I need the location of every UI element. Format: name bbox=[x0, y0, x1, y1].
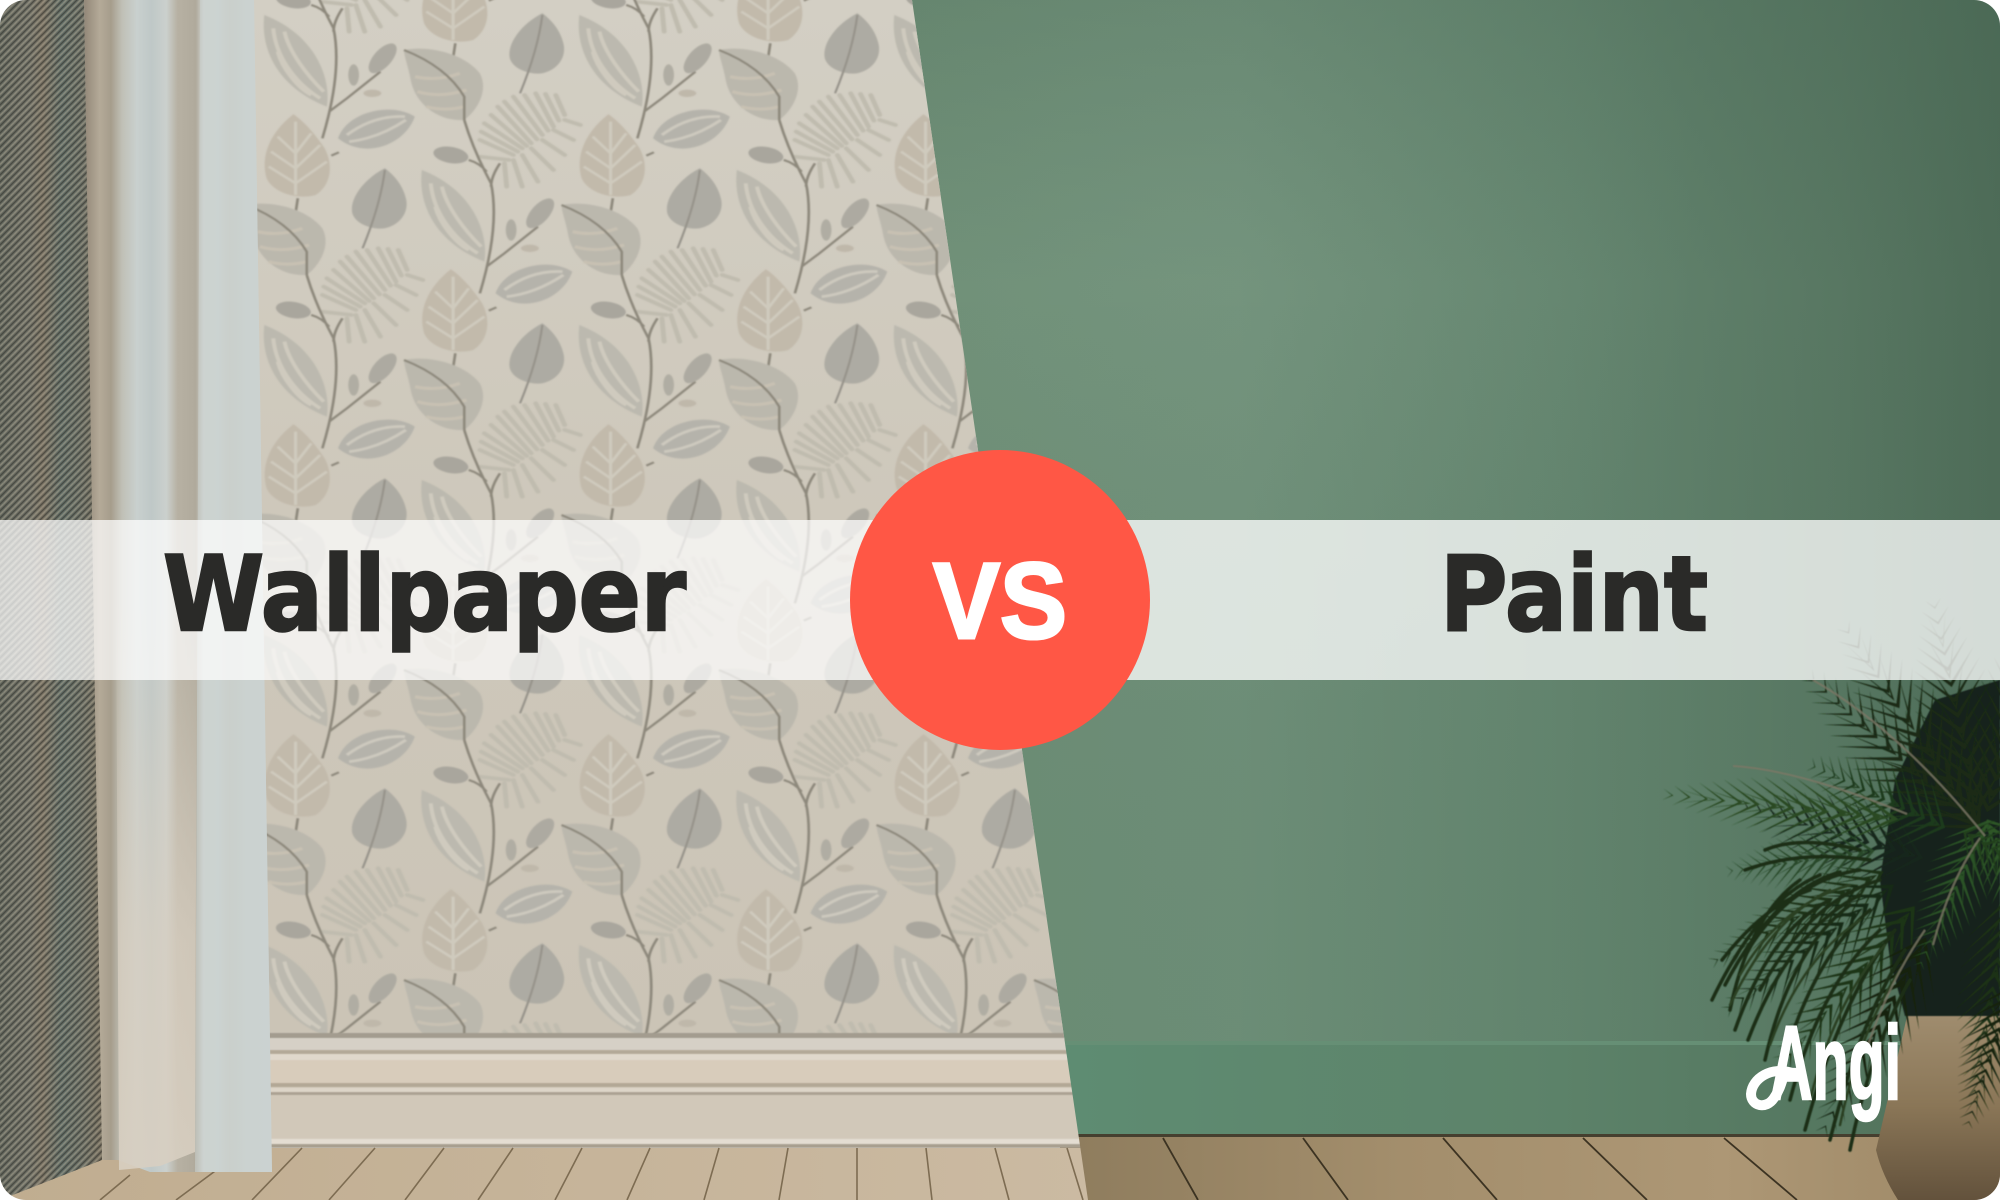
wooden floor: wallpaper side bbox=[0, 1148, 1100, 1200]
heading: Paint: Paint bbox=[1440, 535, 1708, 655]
wooden floor: paint side bbox=[1060, 1134, 2000, 1200]
heading: Wallpaper: Wallpaper bbox=[163, 535, 686, 655]
left translucent title band bbox=[0, 520, 873, 680]
cream baseboard bbox=[240, 1033, 1100, 1148]
curtain: sheer drape bbox=[84, 0, 272, 1172]
logo: Angi: Angi bbox=[1770, 1005, 1901, 1122]
panel: wallpaper side bbox=[0, 0, 1088, 1200]
logo: Angi bbox=[1746, 1022, 1898, 1122]
wallpaper leaf pattern bbox=[257, 0, 1064, 1034]
vs badge: VS bbox=[933, 540, 1067, 661]
potted palm plant bbox=[1660, 590, 2000, 1200]
wallpaper bbox=[0, 0, 1064, 1040]
vs badge bbox=[850, 450, 1150, 750]
right translucent title band bbox=[1126, 520, 2000, 680]
hanging palm wisps bbox=[1712, 842, 1910, 1150]
curtain: dark woven drape bbox=[0, 0, 102, 1200]
green baseboard bbox=[1066, 1041, 1901, 1134]
plant pot bbox=[1876, 1012, 2000, 1200]
panel: paint wall bbox=[880, 0, 2000, 1140]
